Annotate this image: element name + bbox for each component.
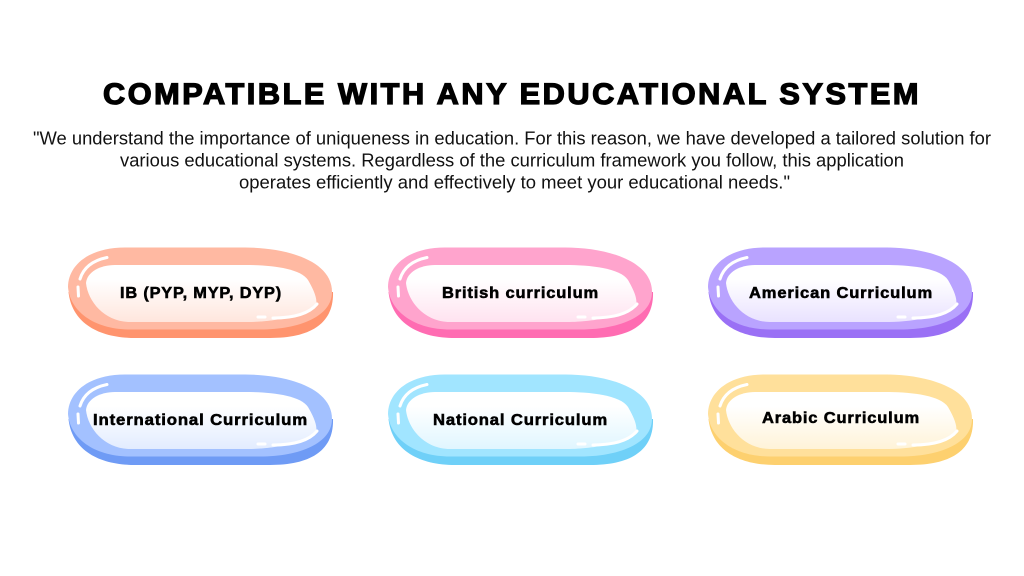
pill: International Curriculum (68, 374, 333, 465)
pill: National Curriculum (388, 374, 653, 465)
pill: Arabic Curriculum (708, 374, 973, 465)
pill: IB: IB (PYP, MYP, DYP) (120, 285, 282, 302)
pill: Arabic Curriculum: Arabic Curriculum (762, 410, 920, 427)
intro paragraph: "We understand the importance of uniqueness in education. For this reason, we have developed a tailored solution for (33, 128, 991, 148)
title: COMPATIBLE WITH ANY EDUCATIONAL SYSTEM (103, 78, 921, 111)
pill: American Curriculum: American Curriculum (749, 285, 933, 302)
intro paragraph: various educational systems. Regardless of the curriculum framework you follow, this application (120, 150, 904, 170)
pill: British curriculum: British curriculum (442, 285, 599, 302)
pill: American Curriculum (708, 248, 973, 338)
intro paragraph: operates efficiently and effectively to meet your educational needs." (239, 172, 790, 192)
pill: British curriculum (388, 248, 653, 338)
intro paragraph (33, 128, 991, 192)
pill: National Curriculum: National Curriculum (433, 412, 608, 429)
pill: International Curriculum: International Curriculum (93, 412, 308, 429)
pill: IB (68, 248, 333, 338)
